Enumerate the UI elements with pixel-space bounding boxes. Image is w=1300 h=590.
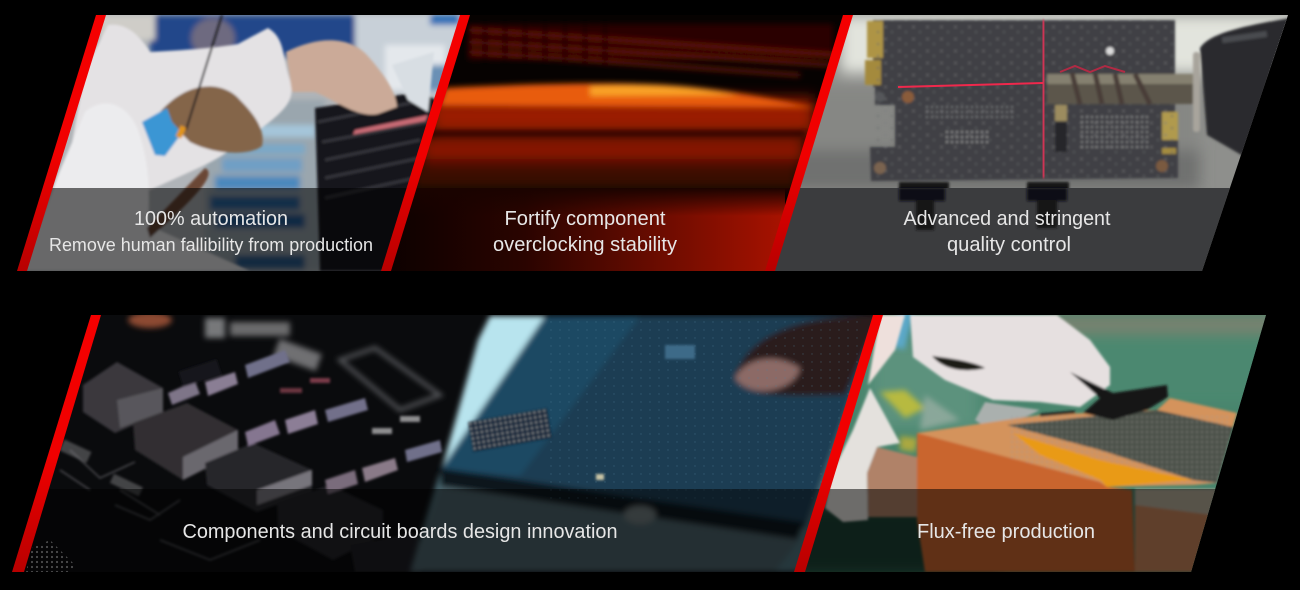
panel: component stability (385, 15, 865, 272)
caption: circuit board design: Components and circuit boards design innovation (182, 521, 618, 543)
caption: component stability: overclocking stability (493, 234, 677, 256)
panel: circuit board design (0, 312, 900, 572)
panel: 100% automation (27, 15, 460, 271)
blue board photo (410, 315, 880, 572)
caption: flux-free production: Flux-free production (917, 521, 1095, 543)
caption: 100% automation: 100% automation (134, 208, 288, 230)
caption: component stability: Fortify component (504, 208, 666, 230)
caption: 100% automation: Remove human fallibility from production (49, 235, 373, 255)
mosfet groups (168, 381, 200, 405)
caption: component stability (493, 208, 677, 256)
panel: quality control (760, 15, 1300, 272)
inductors (83, 362, 163, 433)
caption: 100% automation (49, 208, 373, 255)
caption: quality control: Advanced and stringent (904, 208, 1111, 230)
panel: flux-free production (805, 315, 1266, 572)
orange box (917, 398, 1237, 487)
red accent stripes (12, 15, 883, 572)
caption: quality control (904, 208, 1111, 256)
caption: quality control: quality control (947, 234, 1071, 256)
